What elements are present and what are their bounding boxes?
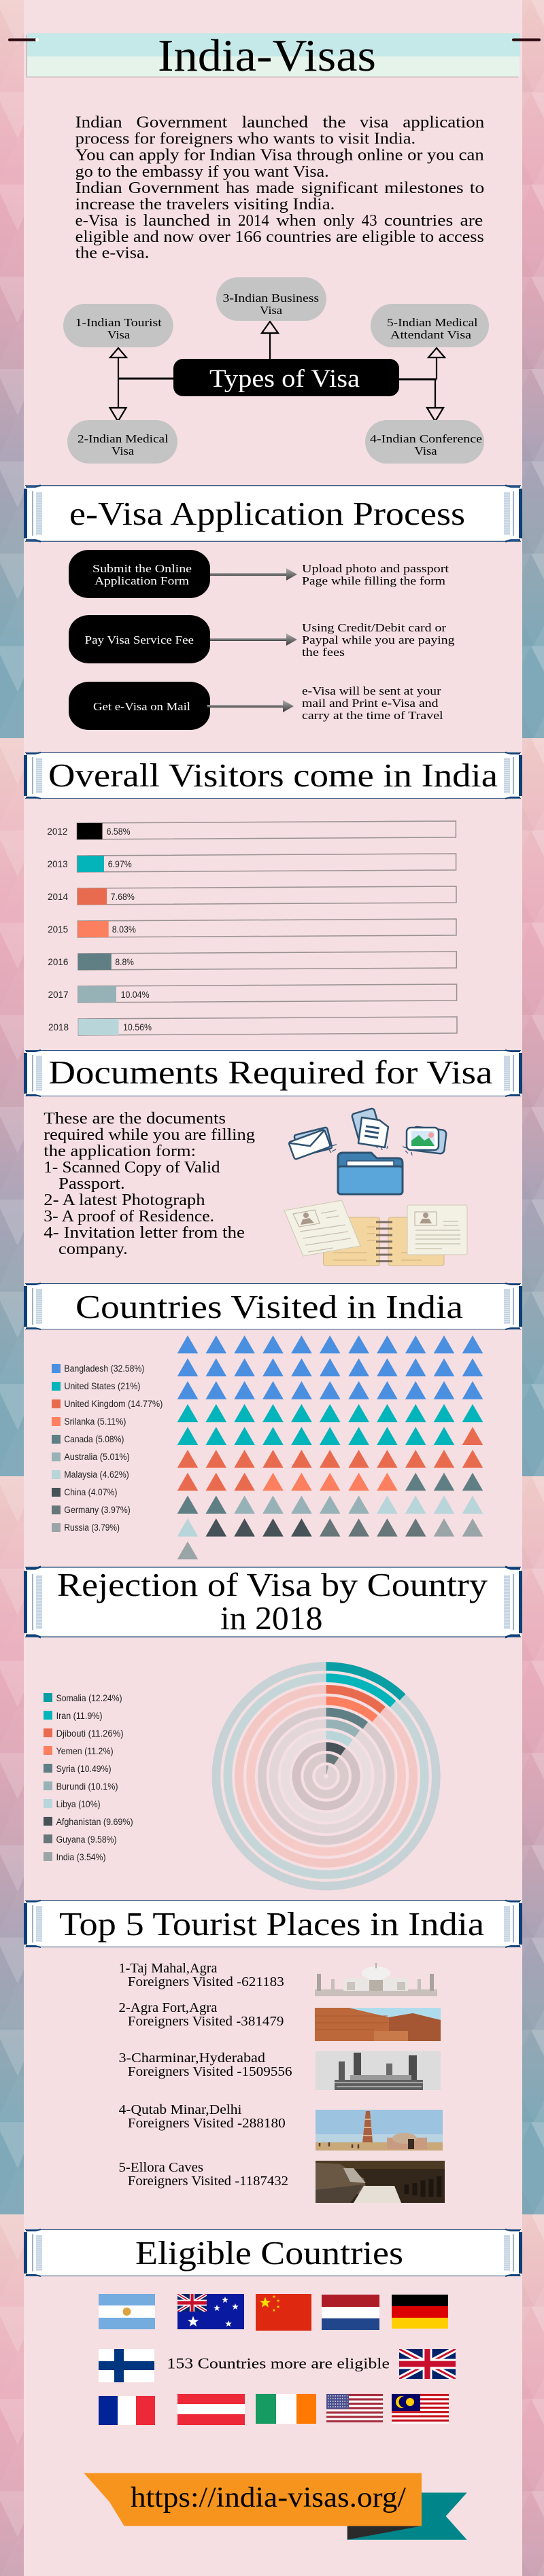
- intro text block: when: [276, 212, 316, 230]
- bar 2018: [48, 1017, 457, 1035]
- tourist place 4: Qutab Minar: Foreigners Visited -288180: [128, 2116, 286, 2131]
- ribbon: website url: https://india-visas.org/: [131, 2482, 406, 2513]
- intro text block: e-Visa: [75, 212, 118, 230]
- tourist place 5: Ellora Caves: Foreigners Visited -1187432: [128, 2174, 288, 2189]
- intro text block: launched: [242, 114, 308, 132]
- flag: China: [256, 2294, 311, 2331]
- heading: Top 5 Tourist Places in India: [24, 1900, 522, 1947]
- documents text list: 1- Scanned Copy of Valid: [44, 1159, 220, 1177]
- text: 153 countries more: 153 Countries more are eligible: [167, 2354, 390, 2372]
- intro text block: the: [322, 114, 346, 132]
- flag: United States: [326, 2394, 383, 2422]
- intro text block: Indian: [75, 179, 122, 197]
- pill: 1-Indian Tourist Visa: Visa: [107, 328, 130, 341]
- icon: left resume: [284, 1200, 360, 1256]
- icon: folder: [338, 1153, 403, 1194]
- legend: countries visited: United States (21%): [64, 1381, 140, 1391]
- tourist place 5: Ellora Caves: [118, 2160, 445, 2203]
- intro text block: has: [226, 179, 250, 197]
- legend: countries visited: Canada (5.08%): [64, 1434, 124, 1444]
- heading: Documents Required for Visa: [24, 1050, 522, 1096]
- legend: rejection by country: Guyana (9.58%): [56, 1834, 117, 1845]
- icon: notebook: [324, 1217, 444, 1266]
- step 3: [69, 682, 443, 730]
- step 3: e-Visa will be sent at your: [302, 684, 441, 697]
- legend: rejection by country: Syria (10.49%): [56, 1764, 112, 1774]
- legend: countries visited: Malaysia (4.62%): [64, 1469, 129, 1480]
- flag: France: [99, 2396, 155, 2425]
- intro text block: is: [125, 212, 136, 230]
- tourist place 2: Agra Fort: [118, 2000, 441, 2041]
- bar 2018: 10.56%: [123, 1022, 152, 1032]
- intro text block: countries: [384, 212, 453, 230]
- intro text block: in: [217, 212, 231, 230]
- legend: rejection by country: Iran (11.9%): [56, 1711, 103, 1721]
- flag: Ireland: [256, 2394, 316, 2424]
- tourist place 2: Agra Fort: 2-Agra Fort,Agra: [118, 2000, 218, 2015]
- documents text list: the application form:: [44, 1143, 196, 1160]
- bar 2015: 8.03%: [112, 924, 136, 935]
- flag: Argentina: [99, 2294, 155, 2329]
- intro text block: are: [460, 212, 483, 230]
- heading: e-Visa Application Process: [24, 485, 522, 542]
- pill: 3-Indian Business Visa: [216, 277, 326, 321]
- documents text list: [44, 1110, 255, 1258]
- pill: 5-Indian Medical Attendant Visa: 5-Indian Medical: [387, 316, 478, 329]
- legend: rejection by country: Somalia (12.24%): [56, 1693, 122, 1703]
- step 3: carry at the time of Travel: [302, 709, 443, 722]
- heading: Top 5 Tourist Places in India: Top 5 Tourist Places in India: [59, 1905, 484, 1943]
- photo: Ellora Caves: [316, 2161, 445, 2203]
- step 2: Paypal while you are paying: [302, 633, 455, 646]
- tourist place 4: Qutab Minar: [118, 2102, 443, 2151]
- intro text block: the e-visa.: [75, 245, 149, 262]
- legend: countries visited: Bangladesh (32.58%): [64, 1363, 144, 1374]
- heading: Rejection of Visa by Country in 2018: in 2018: [220, 1599, 322, 1637]
- bar 2015: [48, 919, 456, 937]
- intro text block: eligible and now over 166 countries are eligible to access: [75, 228, 484, 246]
- bar 2016: 2016: [48, 957, 68, 967]
- tourist place 1: Taj Mahal: 1-Taj Mahal,Agra: [118, 1961, 218, 1976]
- step 2: Pay Visa Service Fee: [84, 633, 194, 646]
- legend: rejection by country: India (3.54%): [56, 1852, 106, 1862]
- step 3: Get e-Visa on Mail: [93, 700, 190, 713]
- flag: Finland: [99, 2349, 154, 2382]
- intro text block: made: [256, 179, 294, 197]
- pill: 2-Indian Medical Visa: 2-Indian Medical: [78, 432, 169, 445]
- bar 2014: 7.68%: [111, 892, 135, 902]
- legend: countries visited: Russia (3.79%): [64, 1522, 120, 1533]
- bar 2015: 2015: [48, 924, 68, 935]
- heading: e-Visa Application Process: e-Visa Application Process: [69, 495, 465, 532]
- pictogram: triangles chart: [177, 1336, 483, 1559]
- legend: rejection by country: Yemen (11.2%): [56, 1746, 114, 1756]
- legend: rejection by country: Libya (10%): [56, 1799, 101, 1809]
- pill: 2-Indian Medical Visa: [67, 420, 177, 464]
- intro text block: to: [470, 179, 484, 197]
- title banner: [10, 31, 539, 81]
- step 1: Application Form: [95, 574, 189, 587]
- bar 2017: [48, 984, 457, 1003]
- pill: 5-Indian Medical Attendant Visa: Attendant Visa: [390, 328, 472, 341]
- icon: documents and folder: [284, 1108, 467, 1266]
- pill: 1-Indian Tourist Visa: 1-Indian Tourist: [75, 316, 162, 329]
- intro text block: increase the travelers visiting India.: [75, 196, 335, 213]
- icon: photo: [407, 1126, 447, 1154]
- step 1: Upload photo and passport: [302, 562, 449, 575]
- legend: rejection by country: Djibouti (11.26%): [56, 1728, 124, 1739]
- documents text list: 4- Invitation letter from the: [44, 1224, 245, 1242]
- bar 2014: [48, 886, 456, 905]
- intro text block: visa: [360, 114, 389, 132]
- legend: countries visited: Germany (3.97%): [64, 1505, 131, 1515]
- process steps: [69, 550, 455, 730]
- flag: Australia: [177, 2294, 244, 2329]
- pill: 4-Indian Conference Visa: [365, 420, 484, 464]
- legend: countries visited: [52, 1363, 163, 1533]
- radial bar chart: rejection of visa: [216, 1667, 436, 1886]
- tourist place 4: Qutab Minar: 4-Qutab Minar,Delhi: [118, 2102, 242, 2117]
- ribbon: website url: [84, 2473, 467, 2540]
- pill: 4-Indian Conference Visa: Visa: [415, 445, 437, 457]
- legend: countries visited: Srilanka (5.11%): [64, 1416, 126, 1427]
- icon: right resume: [407, 1205, 467, 1255]
- tourist place 3: Charminar: Foreigners Visited -1509556: [128, 2064, 292, 2079]
- bar 2014: 2014: [48, 892, 68, 902]
- legend: rejection by country: Burundi (10.1%): [56, 1781, 118, 1792]
- step 2: Using Credit/Debit card or: [302, 621, 446, 634]
- intro text block: Government: [129, 179, 220, 197]
- intro text block: 43: [362, 212, 377, 230]
- legend: countries visited: United Kingdom (14.77%): [64, 1399, 163, 1409]
- step 1: Submit the Online: [92, 562, 192, 575]
- bar 2012: [47, 821, 456, 839]
- icon: sparks: [329, 1145, 412, 1155]
- step 1: Page while filling the form: [302, 574, 445, 587]
- arrows: connectors: [110, 321, 445, 421]
- intro text block: Government: [136, 114, 228, 132]
- photo: Taj Mahal: [315, 1963, 437, 1996]
- heading: Documents Required for Visa: Documents Required for Visa: [48, 1054, 493, 1091]
- tourist place 1: Taj Mahal: [118, 1961, 437, 1996]
- flag: United Kingdom: [399, 2349, 456, 2379]
- bar 2013: 6.97%: [108, 859, 132, 869]
- heading: Countries Visited in India: [24, 1283, 522, 1329]
- tourist place 1: Taj Mahal: Foreigners Visited -621183: [128, 1974, 284, 1989]
- flag: Malaysia: [392, 2394, 449, 2424]
- bar 2017: 10.04%: [121, 990, 150, 1000]
- documents text list: Passport.: [58, 1175, 125, 1193]
- bar 2013: [48, 854, 456, 872]
- legend: rejection by country: Afghanistan (9.69%): [56, 1817, 133, 1827]
- heading: Overall Visitors come in India: [24, 752, 522, 799]
- pill: 3-Indian Business Visa: Visa: [260, 304, 282, 317]
- types of visa diagram: [63, 277, 489, 464]
- heading: Overall Visitors come in India: Overall Visitors come in India: [48, 756, 498, 794]
- heading: Rejection of Visa by Country in 2018: Rejection of Visa by Country: [57, 1566, 488, 1603]
- tourist place 2: Agra Fort: Foreigners Visited -381479: [128, 2014, 284, 2029]
- legend: countries visited: Australia (5.01%): [64, 1452, 130, 1462]
- step 2: the fees: [302, 646, 345, 659]
- documents text list: company.: [58, 1240, 128, 1258]
- heading: Countries Visited in India: Countries Visited in India: [75, 1288, 463, 1325]
- intro text block: significant: [301, 179, 378, 197]
- intro text block: launched: [143, 212, 210, 230]
- title banner: India-Visas: [158, 31, 376, 81]
- intro text block: 2014: [238, 212, 269, 230]
- documents text list: required while you are filling: [44, 1126, 255, 1144]
- intro text block: You can apply for Indian Visa through online or you can: [75, 147, 484, 164]
- flag: Germany: [392, 2295, 448, 2329]
- documents text list: These are the documents: [44, 1110, 226, 1128]
- photo: Charminar: [316, 2051, 441, 2090]
- documents text list: 3- A proof of Residence.: [44, 1208, 214, 1225]
- flag: Austria: [177, 2394, 245, 2425]
- intro text block: Indian: [75, 114, 122, 132]
- heading: Eligible Countries: [24, 2229, 522, 2276]
- photo: Qutab Minar: [316, 2110, 443, 2151]
- step 2: [69, 615, 455, 663]
- heading: Rejection of Visa by Country in 2018: [24, 1566, 522, 1637]
- legend: rejection by country: [44, 1693, 133, 1862]
- bar 2018: 2018: [48, 1022, 69, 1032]
- intro text block: go to the embassy if you want Visa.: [75, 163, 329, 181]
- step 3: mail and Print e-Visa and: [302, 697, 439, 710]
- bar 2016: 8.8%: [115, 957, 134, 967]
- pill: 2-Indian Medical Visa: Visa: [112, 445, 134, 457]
- heading: Eligible Countries: Eligible Countries: [135, 2234, 403, 2272]
- pill: 5-Indian Medical Attendant Visa: [371, 304, 489, 347]
- bar 2016: [48, 952, 456, 970]
- flag: Netherlands: [322, 2295, 379, 2330]
- intro text block: process for foreigners who wants to visit India.: [75, 130, 415, 148]
- tourist place 5: Ellora Caves: 5-Ellora Caves: [118, 2160, 203, 2175]
- bar 2012: 6.58%: [107, 826, 131, 837]
- pill: 1-Indian Tourist Visa: [63, 304, 173, 347]
- pill: 4-Indian Conference Visa: 4-Indian Conference: [370, 432, 482, 445]
- step 1: [69, 550, 449, 598]
- intro text block: application: [403, 114, 484, 132]
- intro text block: milestones: [384, 179, 464, 197]
- bar 2012: 2012: [47, 826, 67, 837]
- center box: types of visa: Types of Visa: [209, 365, 360, 393]
- pill: 3-Indian Business Visa: 3-Indian Business: [223, 292, 319, 304]
- tourist place 3: Charminar: 3-Charminar,Hyderabad: [118, 2051, 265, 2066]
- intro text block: only: [324, 212, 354, 230]
- icon: envelope: [287, 1124, 335, 1162]
- bar chart: overall visitors: [47, 821, 457, 1035]
- photo: Agra Fort: [315, 2008, 441, 2041]
- documents text list: 2- A latest Photograph: [44, 1191, 205, 1209]
- intro text block: [75, 114, 484, 262]
- bar 2017: 2017: [48, 990, 69, 1000]
- legend: countries visited: China (4.07%): [64, 1487, 117, 1497]
- bar 2013: 2013: [48, 859, 68, 869]
- tourist place 3: Charminar: [118, 2051, 441, 2090]
- center box: types of visa: [173, 359, 399, 396]
- icon: document page: [352, 1108, 388, 1147]
